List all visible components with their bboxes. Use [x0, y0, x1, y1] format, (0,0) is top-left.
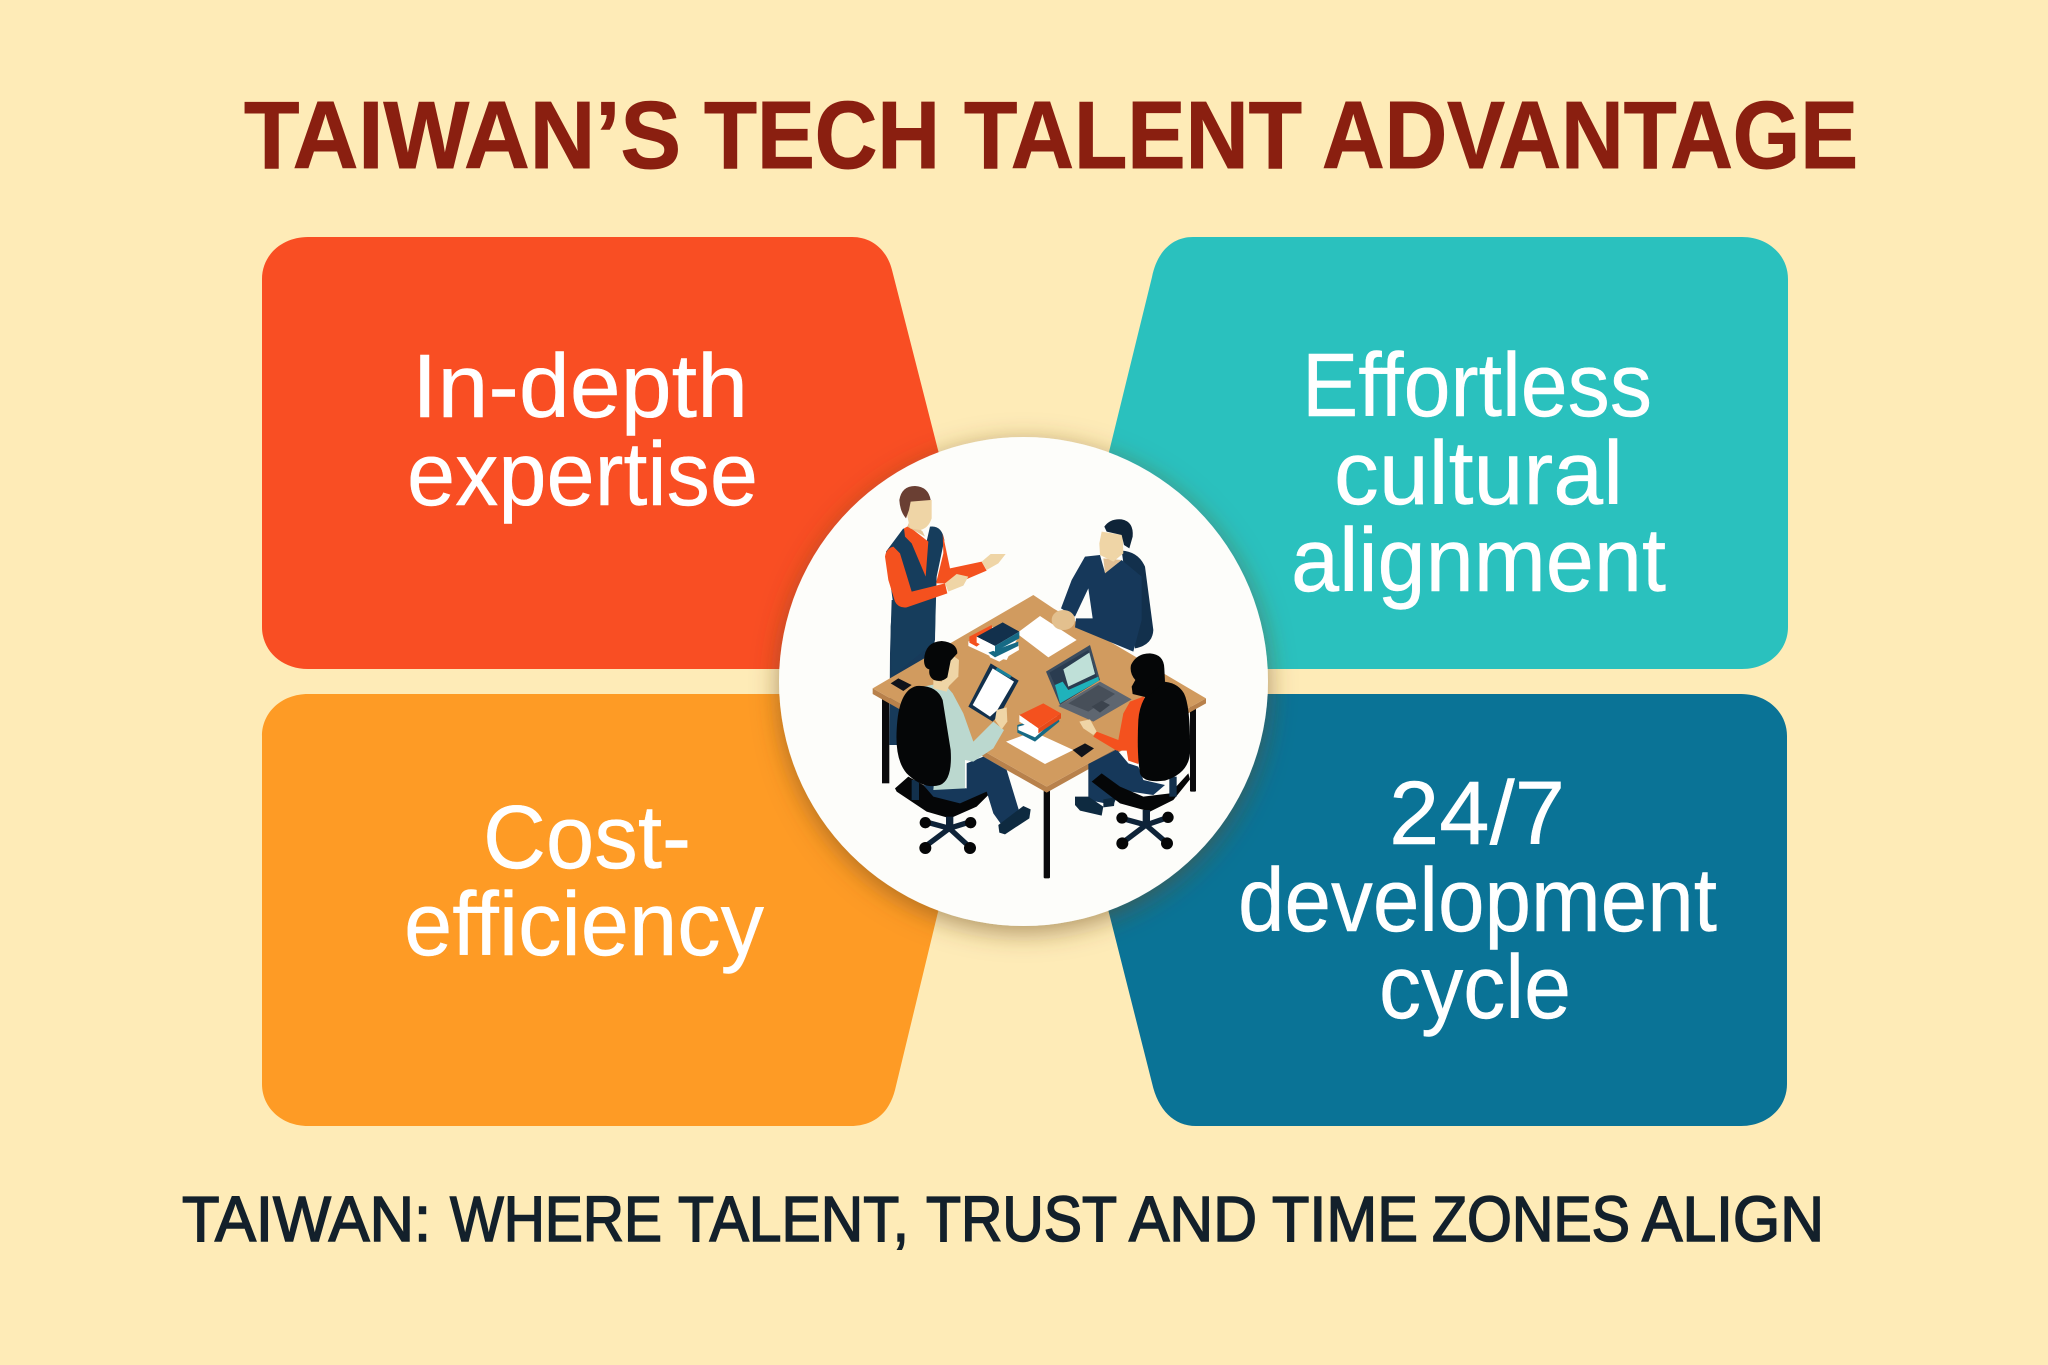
tagline: TIME: [1272, 1183, 1418, 1255]
panel: effortless cultural alignment: alignment: [1291, 511, 1666, 611]
tablet: [968, 663, 1019, 722]
panel: cost-efficiency: efficiency: [404, 875, 764, 975]
panel: effortless cultural alignment: cultural: [1334, 424, 1623, 524]
title: TAIWAN’S: [244, 82, 681, 189]
illustration: team meeting around a table: [873, 486, 1206, 878]
laptop: [1046, 645, 1132, 722]
panel: cost-efficiency: [262, 694, 1000, 1126]
tagline: TALENT,: [678, 1183, 909, 1255]
panel: in-depth expertise: expertise: [407, 425, 758, 525]
books, bottom: [1017, 703, 1061, 742]
tagline: TRUST: [926, 1183, 1116, 1255]
table: [873, 595, 1206, 878]
tagline: TAIWAN:: [182, 1183, 431, 1255]
panel: effortless cultural alignment: [1050, 237, 1788, 669]
person: seated man, back right: [1052, 519, 1153, 652]
person: seated woman with laptop, front right: [1075, 653, 1190, 849]
panel: in-depth expertise: [262, 237, 1000, 669]
panel: 24/7 development cycle: development: [1238, 851, 1717, 951]
person: standing presenter: [885, 486, 1006, 745]
panel: 24/7 development cycle: 24/7: [1389, 764, 1565, 864]
title: TALENT: [964, 82, 1302, 189]
tagline: WHERE: [450, 1183, 662, 1255]
panel: 24/7 development cycle: [1050, 694, 1787, 1126]
panel: cost-efficiency: Cost-: [483, 788, 691, 888]
panel: effortless cultural alignment: Effortless: [1302, 336, 1652, 436]
person: seated man with tablet, front left: [895, 641, 1031, 854]
center circle: [779, 437, 1268, 926]
title: ADVANTAGE: [1322, 82, 1858, 189]
tagline: ALIGN: [1642, 1183, 1824, 1255]
phones: [891, 678, 1094, 757]
panel: in-depth expertise: In-depth: [412, 337, 748, 437]
tagline: AND: [1129, 1183, 1257, 1255]
papers on table: [1006, 616, 1077, 764]
tagline: ZONES: [1432, 1183, 1630, 1255]
title: TECH: [704, 82, 940, 189]
panel: 24/7 development cycle: cycle: [1379, 938, 1571, 1038]
books, top left: [968, 622, 1020, 662]
